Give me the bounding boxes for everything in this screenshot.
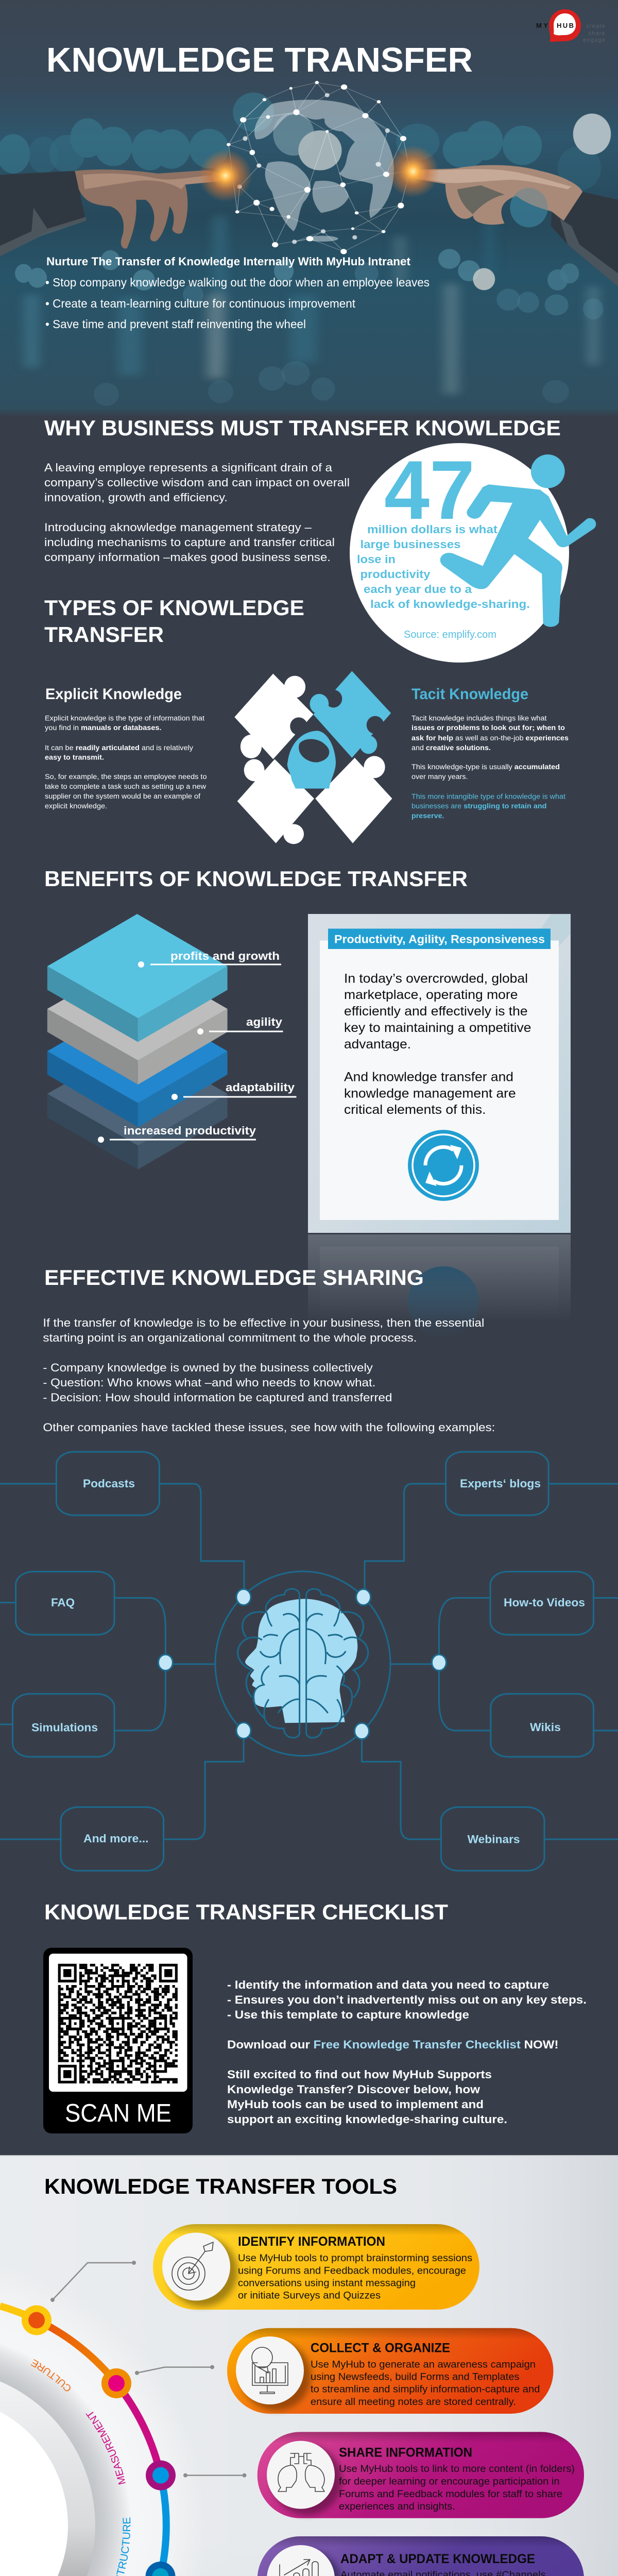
text block: knowledge sharing intro: - Company knowledge is owned by the business collectively — [43, 1361, 373, 1374]
hero bullet list — [45, 276, 430, 331]
card body text: marketplace, operating more — [344, 988, 518, 1002]
pill: identify information: or initiate Surveys and Quizzes — [238, 2290, 381, 2301]
text block: checklist — [227, 1978, 587, 2126]
QR code: SCAN ME — [65, 2099, 171, 2127]
heading: BENEFITS OF KNOWLEDGE TRANSFER — [44, 867, 468, 891]
text block: checklist: MyHub tools can be used to implement and — [227, 2098, 484, 2111]
box: FAQ — [16, 1571, 114, 1635]
text block: explicit knowledge: easy to transmit. — [45, 753, 104, 761]
box: FAQ: FAQ — [51, 1596, 75, 1609]
text block: checklist: - Identify the information and data you need to capture — [227, 1978, 549, 1991]
text block: tacit knowledge — [411, 686, 569, 820]
pill: identify information — [153, 2224, 479, 2310]
text block: knowledge sharing intro: starting point is an organizational commitment to the whole process. — [43, 1331, 417, 1344]
text block: checklist: support an exciting knowledge-sharing culture. — [227, 2113, 507, 2126]
pill: adapt and update knowledge: ADAPT & UPDATE KNOWLEDGE — [340, 2552, 535, 2566]
icon: heads with plugs — [278, 2453, 324, 2492]
box: Podcasts: Podcasts — [83, 1477, 135, 1490]
box: Webinars — [441, 1807, 544, 1871]
text block: explicit knowledge: take to complete a task such as setting up a new — [45, 783, 206, 790]
text block: tacit knowledge: ask for help as well as on-the-job experiences — [411, 734, 569, 742]
box: How-to Videos: How-to Videos — [504, 1596, 585, 1609]
node: culture — [22, 2305, 52, 2335]
box: Webinars: Webinars — [468, 1833, 520, 1845]
label: adaptability: adaptability — [226, 1081, 295, 1094]
arc labels: CULTURE — [31, 2359, 71, 2392]
card body text: key to maintaining a ompetitive — [344, 1021, 531, 1035]
panel: types of knowledge transfer — [44, 596, 569, 844]
text block: explicit knowledge: It can be readily articulated and is relatively — [45, 744, 193, 752]
icon: sync arrows — [408, 1130, 479, 1201]
card body text: efficiently and effectively is the — [344, 1004, 528, 1019]
text block: tacit knowledge: This knowledge-type is usually accumulated — [411, 763, 560, 771]
hero subtitle: Nurture The Transfer of Knowledge Internally With MyHub Intranet — [46, 255, 411, 268]
card body text — [344, 972, 531, 1117]
chart: circular arc timeline — [0, 2261, 246, 2576]
text block: tacit knowledge: Tacit knowledge includes things like what — [411, 714, 547, 722]
heading: TYPES OF KNOWLEDGE — [44, 596, 304, 620]
label: increased productivity — [98, 1124, 256, 1143]
panel: knowledge transfer tools — [0, 2174, 584, 2576]
text block: explicit knowledge: explicit knowledge. — [45, 802, 107, 810]
node: technology — [145, 2562, 175, 2576]
text block: tacit knowledge: Tacit Knowledge — [411, 686, 528, 703]
icon: chart with speech bubble — [252, 2347, 288, 2394]
text block: explicit knowledge — [45, 686, 207, 810]
hero image: hands touching globe — [0, 0, 618, 416]
text block: tacit knowledge: and creative solutions. — [411, 744, 491, 752]
stat circle: 47 million dollars: lose in — [357, 553, 396, 566]
heading: TRANSFER — [44, 622, 164, 647]
heading: KNOWLEDGE TRANSFER CHECKLIST — [44, 1900, 448, 1924]
panel: productivity card — [308, 914, 571, 1233]
text block: checklist: - Ensures you don’t inadvertently miss out on any key steps. — [227, 1993, 587, 2006]
hero bullet list: • Create a team-learning culture for continuous improvement — [45, 297, 356, 310]
icon: puzzle with head — [234, 671, 392, 844]
pill: collect and organize — [227, 2328, 553, 2414]
node: measurement — [101, 2368, 131, 2398]
light section background — [0, 2155, 618, 2576]
heading: WHY BUSINESS MUST TRANSFER KNOWLEDGE — [44, 416, 561, 440]
icon: growth chart — [280, 2560, 322, 2576]
text block: intro paragraphs: company’s collective wisdom and can impact on overall — [44, 476, 350, 489]
box: Podcasts — [56, 1452, 159, 1515]
hero bullet list: • Save time and prevent staff reinventing the wheel — [45, 317, 306, 331]
pill: share information: Use MyHub tools to link to more content (in folders) — [339, 2463, 575, 2475]
pill: identify information: using Forums and Feedback modules, encourage — [238, 2265, 466, 2276]
box: Experts' blogs — [446, 1452, 548, 1515]
pill: share information: Forums and Feedback modules for staff to share — [339, 2488, 562, 2500]
box: Wikis: Wikis — [530, 1721, 561, 1734]
heading: EFFECTIVE KNOWLEDGE SHARING — [44, 1265, 424, 1290]
pill: share information: experiences and insights. — [339, 2501, 455, 2512]
label: agility: agility — [246, 1015, 283, 1028]
connector nodes — [158, 1589, 446, 1739]
pill: adapt and update knowledge — [258, 2536, 584, 2576]
card body text: critical elements of this. — [344, 1103, 486, 1117]
panel: knowledge transfer checklist — [43, 1900, 587, 2133]
icon: running person — [440, 454, 596, 627]
pill: identify information: Use MyHub tools to prompt brainstorming sessions — [238, 2252, 472, 2264]
box: Simulations: Simulations — [31, 1721, 98, 1734]
card body text: In today’s overcrowded, global — [344, 972, 528, 986]
text block: tacit knowledge: This more intangible type of knowledge is what — [411, 792, 565, 801]
chart: stacked layers — [47, 914, 297, 1170]
node: infrastructure — [146, 2461, 176, 2490]
logo: MyHub — [536, 9, 606, 43]
pill: share information: SHARE INFORMATION — [339, 2446, 472, 2460]
text block: tacit knowledge: businesses are struggling to retain and — [411, 802, 547, 810]
arc labels: MEASUREMENT — [85, 2412, 126, 2484]
panel: hero — [0, 0, 618, 416]
pill: share information — [258, 2432, 584, 2518]
stat circle: 47 million dollars: lack of knowledge-sharing. — [370, 598, 530, 611]
text block: intro paragraphs: innovation, growth and efficiency. — [44, 491, 228, 504]
pill: collect and organize: to streamline and simplify information-capture and — [311, 2384, 540, 2395]
box: And more — [61, 1807, 164, 1871]
panel: why business must transfer knowledge — [44, 416, 596, 663]
icon: brain in head — [237, 1589, 368, 1738]
card header: Productivity, Agility, Responsiveness — [334, 933, 545, 946]
panel: effective knowledge sharing — [0, 1265, 618, 1871]
text block: knowledge sharing intro: Other companies have tackled these issues, see how with the following examples: — [43, 1421, 495, 1434]
text block: tacit knowledge: over many years. — [411, 773, 468, 781]
panel: benefits of knowledge transfer — [44, 867, 571, 1337]
text block: knowledge sharing intro: - Decision: How should information be captured and transferred — [43, 1391, 392, 1404]
text block: tacit knowledge: issues or problems to look out for; when to — [411, 724, 565, 732]
text block: knowledge sharing intro: - Question: Who knows what –and who needs to know what. — [43, 1376, 375, 1389]
card header — [328, 928, 551, 949]
card body text: advantage. — [344, 1037, 411, 1052]
text block: intro paragraphs: A leaving employe represents a significant drain of a — [44, 461, 333, 474]
text block: explicit knowledge: So, for example, the steps an employee needs to — [45, 773, 207, 781]
text block: checklist: Download our Free Knowledge Transfer Checklist NOW! — [227, 2038, 559, 2051]
card body text: knowledge management are — [344, 1087, 516, 1101]
pill: collect and organize: Use MyHub to generate an awareness campaign — [311, 2359, 536, 2370]
box: Simulations — [12, 1694, 114, 1757]
stat circle: 47 million dollars: 47 — [384, 444, 475, 537]
pill: identify information: conversations using instant messaging — [238, 2277, 416, 2289]
connector lines — [50, 2261, 246, 2576]
text block: intro paragraphs: including mechanisms to capture and transfer critical — [44, 536, 335, 549]
label: adaptability — [171, 1081, 297, 1100]
label: profits and growth: profits and growth — [170, 950, 280, 962]
stat circle: 47 million dollars: million dollars is what — [367, 523, 498, 536]
box: Wikis — [491, 1694, 593, 1757]
arc labels — [31, 2359, 131, 2576]
chart: knowledge sharing network — [0, 1452, 618, 1871]
pill: share information: for deeper learning or encourage participation in — [339, 2476, 560, 2487]
text block: knowledge sharing intro — [43, 1316, 495, 1434]
logo: MyHub: share — [588, 30, 606, 37]
text block: checklist: Still excited to find out how MyHub Supports — [227, 2068, 492, 2081]
label: increased productivity: increased productivity — [124, 1124, 256, 1137]
text block: explicit knowledge: Explicit knowledge is the type of information that — [45, 714, 204, 722]
stat circle: 47 million dollars: large businesses — [360, 538, 460, 551]
stat circle: 47 million dollars: productivity — [360, 568, 431, 581]
title: KNOWLEDGE TRANSFER — [46, 41, 473, 79]
hero bullet list: • Stop company knowledge walking out the door when an employee leaves — [45, 276, 430, 289]
stat circle: 47 million dollars: each year due to a — [364, 583, 472, 596]
heading: KNOWLEDGE TRANSFER TOOLS — [44, 2174, 397, 2198]
text block: knowledge sharing intro: If the transfer of knowledge is to be effective in your business, then the essential — [43, 1316, 484, 1329]
QR code — [43, 1948, 193, 2133]
pill: collect and organize: COLLECT & ORGANIZE — [311, 2342, 450, 2355]
card reflection — [308, 1234, 571, 1337]
pill: collect and organize: using Newsfeeds, build Forms and Templates — [311, 2371, 520, 2383]
card body text: And knowledge transfer and — [344, 1070, 513, 1084]
logo: MyHub: engage — [583, 37, 606, 43]
text block: explicit knowledge: Explicit Knowledge — [45, 686, 182, 703]
text block: intro paragraphs: Introducing aknowledge management strategy – — [44, 521, 312, 534]
text block: intro paragraphs — [44, 461, 350, 564]
heading — [44, 596, 304, 647]
box: And more: And more... — [83, 1832, 148, 1845]
pill: collect and organize: ensure all meeting notes are stored centrally. — [311, 2396, 516, 2408]
logo: MyHub: MY — [536, 22, 548, 29]
text block: checklist: Knowledge Transfer? Discover below, how — [227, 2083, 480, 2096]
box: Experts' blogs: Experts‘ blogs — [460, 1477, 541, 1490]
label: agility — [197, 1015, 283, 1035]
text block: explicit knowledge: you find in manuals or databases. — [45, 724, 162, 732]
text block: checklist: - Use this template to capture knowledge — [227, 2008, 469, 2021]
text block: tacit knowledge: preserve. — [411, 812, 444, 820]
pill: identify information: IDENTIFY INFORMATION — [238, 2235, 385, 2249]
text block: explicit knowledge: supplier on the system would be an example of — [45, 792, 200, 800]
stat circle: 47 million dollars — [350, 443, 596, 663]
label: profits and growth — [138, 950, 281, 968]
logo: MyHub: create — [586, 23, 606, 29]
stat circle: 47 million dollars: Source: emplify.com — [404, 629, 496, 640]
box: How-to Videos — [490, 1571, 593, 1635]
text block: intro paragraphs: company information –makes good business sense. — [44, 551, 331, 564]
icon: target — [172, 2242, 213, 2290]
logo: MyHub: HUB — [557, 22, 574, 29]
